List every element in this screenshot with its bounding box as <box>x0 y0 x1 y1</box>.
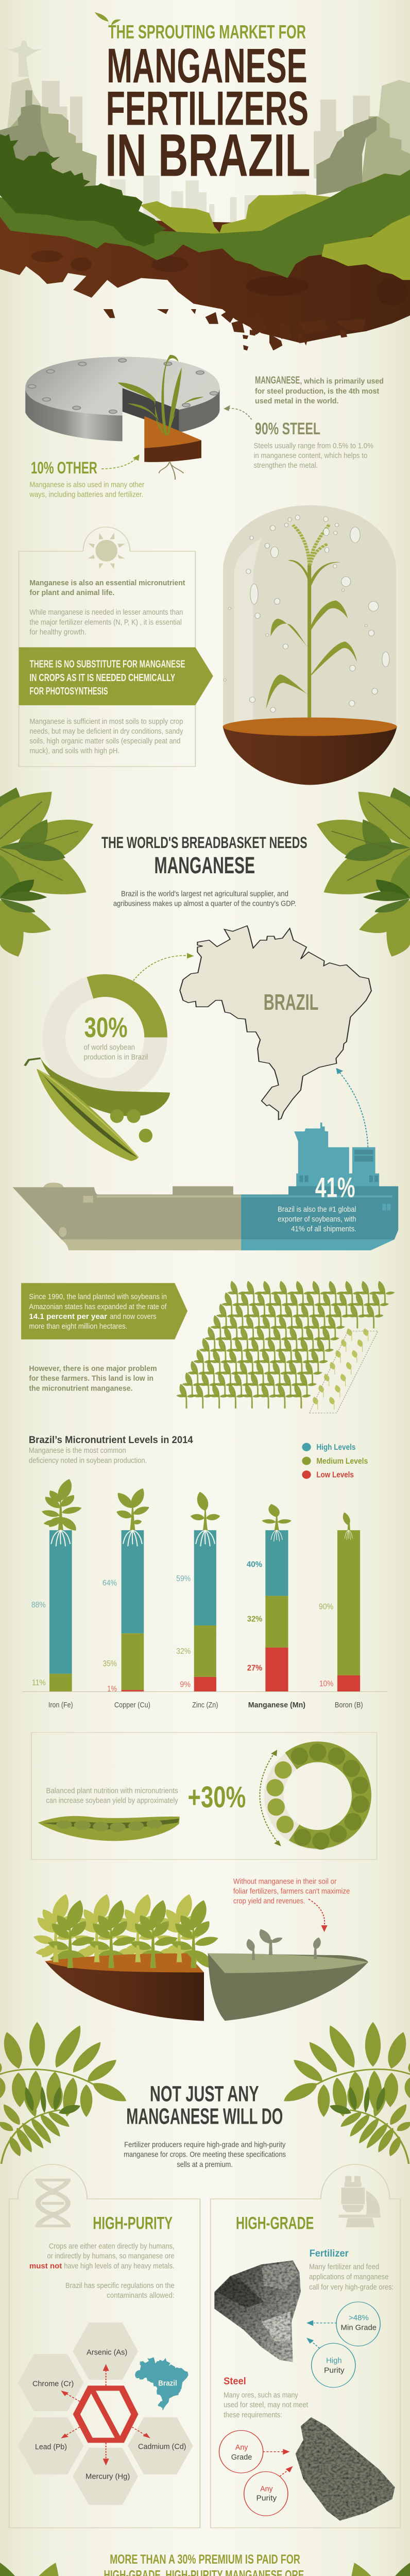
illustration: pea pods <box>25 1058 170 1161</box>
heading: micronutrient levels: Brazil’s Micronutrient Levels in 2014 <box>29 1434 193 1445</box>
diagram: contaminant hexagons <box>18 2323 193 2505</box>
text: crops eaten by humans: Crops are either eaten directly by humans, <box>49 2242 175 2250</box>
text: balanced nutrition <box>46 1787 178 1805</box>
leaves right <box>317 787 410 957</box>
text: without manganese <box>233 1877 350 1905</box>
fern left <box>0 2022 131 2164</box>
bar value labels: 32% <box>247 1615 262 1623</box>
callout: no substitute banner: THERE IS NO SUBSTITUTE FOR MANGANESE <box>29 658 185 670</box>
soil chunks <box>104 309 366 350</box>
steel disc pie <box>25 357 219 441</box>
legend: levels: High Levels <box>316 1443 355 1451</box>
grass and bushes <box>0 134 410 280</box>
callout: land expansion banner: and now covers <box>110 1312 157 1320</box>
bar category labels: Iron (Fe) <box>48 1701 73 1709</box>
bar value labels: 40% <box>247 1560 262 1569</box>
arrows: steel badges to rock <box>263 2449 293 2477</box>
illustration: open pea pod <box>38 1816 180 1841</box>
heading: world's breadbasket needs manganese <box>101 834 308 878</box>
heading: high-grade: HIGH-GRADE <box>236 2213 314 2233</box>
badge: any purity <box>244 2471 288 2516</box>
bar value labels: 10% <box>319 1679 333 1688</box>
bar category labels: Boron (B) <box>335 1701 363 1709</box>
diagram: contaminant hexagons: Arsenic (As) <box>87 2348 127 2357</box>
bar: copper <box>122 1530 144 1692</box>
illustration: high grade ore rock <box>214 2261 301 2362</box>
arrow: ship to map <box>336 1068 368 1147</box>
text: essential micronutrient: for plant and animal life. <box>29 588 114 597</box>
section: the opportunity <box>0 2552 410 2576</box>
callout: land expansion banner: more than eight million hectares. <box>29 1322 127 1331</box>
text: producers require: Fertilizer producers require high-grade and high-purity <box>124 2141 286 2149</box>
icon: microscope <box>338 2176 381 2227</box>
bar value labels: 90% <box>319 1602 333 1611</box>
text: essential micronutrient: Manganese is also an essential micronutrient <box>29 579 185 587</box>
illustration: cargo ship: Brazil is also the #1 global <box>278 1205 356 1213</box>
bar value labels: 64% <box>102 1579 117 1587</box>
text: major problem: However, there is one major problem <box>29 1364 157 1372</box>
text: lesser amounts: the major fertilizer elements (N, P, K) , it is essential <box>29 618 182 626</box>
callout: no substitute banner: FOR PHOTOSYNTHESIS <box>29 685 108 697</box>
illustration: healthy soil half <box>45 1945 204 2021</box>
text: major problem: for these farmers. This land is low in <box>29 1374 153 1383</box>
text: other uses: ways, including batteries and fertilizer. <box>29 490 143 499</box>
text: intro: Brazil is the world's largest net agricultural supplier, and <box>121 890 288 898</box>
text: other uses: Manganese is also used in many other <box>29 481 144 489</box>
legend: levels <box>302 1443 368 1479</box>
arrow: donut to map <box>133 953 194 980</box>
text: crops eaten by humans: Brazil has specific regulations on the <box>65 2281 175 2290</box>
bar value labels: 27% <box>247 1664 262 1672</box>
sprout on the title T <box>95 12 121 26</box>
map: Brazil <box>180 926 371 1120</box>
callout: land expansion banner: Since 1990, the land planted with soybeans in <box>29 1293 167 1301</box>
text: fertilizer applications <box>309 2263 394 2291</box>
leaves left <box>0 2563 121 2576</box>
bar category labels <box>48 1701 363 1709</box>
text: balanced nutrition: Balanced plant nutrition with micronutrients <box>46 1787 178 1795</box>
bar value labels: 88% <box>31 1600 46 1609</box>
bar category labels: Zinc (Zn) <box>192 1701 218 1709</box>
chart: 30% donut: 30% <box>84 1012 128 1043</box>
panel: micronutrient box outline <box>19 527 195 767</box>
text: lesser amounts <box>29 608 183 636</box>
diagram: contaminant hexagons: Cadmium (Cd) <box>138 2443 186 2451</box>
bar: zinc <box>194 1530 216 1692</box>
hero: title and landscape <box>0 12 410 343</box>
badge: any grade <box>219 2430 263 2473</box>
diagram: contaminant hexagons: Mercury (Hg) <box>86 2472 130 2481</box>
text: producers require: manganese for crops. Ore meeting these specifications <box>124 2150 286 2159</box>
map: Brazil mini: Brazil <box>158 2379 177 2387</box>
bar value labels: 32% <box>176 1647 191 1656</box>
text: producers require: sells at a premium. <box>177 2160 233 2168</box>
map: Brazil: BRAZIL <box>264 989 318 1014</box>
text: major problem <box>29 1364 157 1393</box>
callout: no substitute banner <box>19 647 213 705</box>
chart: ring of peas <box>264 1741 371 1850</box>
title: manganese fertilizers in Brazil <box>105 38 311 189</box>
illustration: plants above bars <box>40 1478 352 1533</box>
text: steel ores <box>224 2391 308 2419</box>
arrow: double headed arc <box>260 1750 281 1846</box>
badge: high purity <box>312 2343 355 2387</box>
text: steels <box>253 442 373 469</box>
diagram: contaminant hexagons: Lead (Pb) <box>35 2443 67 2451</box>
icon: sun <box>88 533 125 569</box>
chart: 30% donut: production is in Brazil <box>83 1053 148 1061</box>
arrow: steel to disc <box>224 405 251 419</box>
text: without manganese: crop yield and revenues. <box>233 1897 305 1905</box>
bar: boron <box>337 1530 360 1692</box>
bar category labels: Copper (Cu) <box>114 1701 150 1709</box>
bar value labels: 35% <box>103 1659 117 1668</box>
stat: 10% other: 10% OTHER <box>31 459 97 477</box>
arrow: to weak plants <box>309 1899 328 1932</box>
panel: steel vs other pie <box>19 309 397 785</box>
section: high purity and high grade <box>9 2164 400 2528</box>
illustration: cargo ship: 41% <box>315 1172 355 1203</box>
badge: min grade: >48% <box>349 2314 369 2322</box>
text: manganese 4th most used metal <box>255 375 384 405</box>
badge: high purity: High <box>326 2357 342 2365</box>
legend: levels: Medium Levels <box>316 1456 368 1465</box>
text: steel ores: Many ores, such as many <box>224 2391 298 2399</box>
text: crops eaten by humans: must not <box>29 2262 62 2270</box>
callout: land expansion banner: Amazonian states has expanded at the rate of <box>29 1302 167 1311</box>
text: manganese 4th most used metal: used metal in the world. <box>255 397 338 405</box>
chart: 30% donut: of world soybean <box>83 1043 135 1052</box>
heading: high-purity: HIGH-PURITY <box>93 2213 173 2233</box>
illustration: soybean plant field <box>176 1280 395 1413</box>
soil wedge with plant <box>117 355 204 480</box>
text: without manganese: Without manganese in their soil or <box>233 1877 337 1886</box>
text: steels: strengthen the metal. <box>253 461 318 469</box>
illustration: cargo ship: exporter of soybeans, with <box>278 1215 356 1223</box>
text: balanced nutrition: can increase soybean yield by approximately <box>46 1797 178 1805</box>
bar: iron <box>49 1530 72 1692</box>
badge: any grade: Grade <box>231 2453 252 2461</box>
text: steel ores: used for steel, may not meet <box>224 2401 308 2409</box>
text: chart subtitle: Manganese is the most common <box>29 1446 126 1455</box>
panel: high-grade <box>211 2164 400 2528</box>
text: essential micronutrient <box>29 579 185 597</box>
leaves left <box>0 787 93 957</box>
bar value labels <box>31 1560 333 1693</box>
stat: 90% steel: 90% STEEL <box>255 419 320 438</box>
text: crops eaten by humans <box>29 2242 175 2300</box>
bar value labels: 9% <box>180 1680 191 1689</box>
diagram: contaminant hexagons: Chrome (Cr) <box>32 2380 74 2388</box>
text: major problem: the micronutrient manganese. <box>29 1384 132 1393</box>
badge: any purity: Purity <box>257 2494 277 2502</box>
callout: 30% premium <box>104 2552 306 2576</box>
section: soybean expansion <box>21 1280 395 1533</box>
text: crops eaten by humans: contaminants allowed: <box>107 2291 175 2300</box>
city skyline <box>0 40 410 229</box>
section: world's breadbasket <box>0 787 410 957</box>
stat: +30%: +30% <box>188 1781 246 1814</box>
callout: land expansion banner <box>21 1283 187 1340</box>
callout: land expansion banner: 14.1 percent per year <box>29 1312 107 1320</box>
text: without manganese: foliar fertilizers, farmers can't maximize <box>233 1887 350 1895</box>
legend: levels: Low Levels <box>316 1470 354 1479</box>
badge: high purity: Purity <box>324 2366 345 2375</box>
text: soil sufficiency: needs, but may be deficient in dry conditions, sandy <box>29 727 183 735</box>
text: soil sufficiency <box>29 717 183 755</box>
heading: not just any manganese will do: NOT JUST ANY <box>150 2081 259 2106</box>
bar value labels: 11% <box>32 1678 46 1687</box>
fern right <box>279 2022 410 2164</box>
illustration: depleted soil half <box>208 1928 368 2021</box>
callout: no substitute banner: IN CROPS AS IT IS NEEDED CHEMICALLY <box>29 672 175 684</box>
heading: world's breadbasket needs manganese: MANGANESE <box>155 853 255 878</box>
heading: fertilizer: Fertilizer <box>310 2248 349 2259</box>
illustration: healthy plants <box>32 1893 220 1971</box>
chart: micronutrient stacked bars <box>22 1530 387 1859</box>
text: other uses <box>29 481 144 499</box>
illustration: cargo ship: 41% of all shipments. <box>291 1225 356 1233</box>
section: soybean map and ship <box>12 926 398 1250</box>
leaves right <box>290 2563 410 2576</box>
text: manganese 4th most used metal: MANGANESE <box>255 375 300 386</box>
illustration: steel ore rock <box>296 2417 395 2521</box>
text: intro <box>113 890 296 908</box>
text: steel ores: these requirements: <box>224 2411 282 2419</box>
text: soil sufficiency: Manganese is sufficient in most soils to supply crop <box>29 717 183 725</box>
bar category labels: Manganese (Mn) <box>248 1701 305 1709</box>
badge: any purity: Any <box>260 2485 273 2493</box>
text: intro: agribusiness makes up almost a quarter of the country's GDP. <box>113 900 296 908</box>
badge: min grade: Min Grade <box>341 2324 377 2332</box>
text: fertilizer applications: Many fertilizer and feed <box>309 2263 379 2271</box>
heading: steel: Steel <box>224 2376 246 2386</box>
text: crops eaten by humans: or indirectly by humans, so manganese ore <box>47 2252 175 2260</box>
arrow: other to wedge <box>101 454 140 469</box>
map: Brazil mini <box>135 2357 189 2410</box>
arrows: fertilizer badges to rock <box>306 2320 337 2348</box>
text: lesser amounts: for healthy growth. <box>29 628 87 636</box>
text: lesser amounts: While manganese is needed in lesser amounts than <box>29 608 183 617</box>
heading: not just any manganese will do <box>126 2081 283 2129</box>
bar: manganese <box>265 1530 288 1692</box>
text: crops eaten by humans: have high levels of any heavy metals. <box>64 2262 175 2270</box>
panel: +30% yield box <box>31 1733 377 1859</box>
badge: any grade: Any <box>235 2443 248 2451</box>
icon: DNA helix <box>36 2179 71 2227</box>
soil layer <box>0 217 410 343</box>
illustration: glass dome with plant <box>223 505 397 785</box>
bar value labels: 59% <box>176 1574 191 1583</box>
section: soil comparison <box>0 1877 410 2168</box>
text: chart subtitle <box>29 1446 147 1465</box>
panel: high-purity <box>9 2164 200 2528</box>
illustration: cargo ship <box>12 1123 398 1250</box>
chart: 30% donut <box>42 974 167 1101</box>
text: soil sufficiency: muck), and soils with high pH. <box>29 747 119 755</box>
text: producers require <box>124 2141 286 2168</box>
text: chart subtitle: deficiency noted in soybean production. <box>29 1456 147 1465</box>
bar value labels: 1% <box>107 1685 117 1693</box>
text: soil sufficiency: soils, high organic matter soils (especially peat and <box>29 737 180 745</box>
badge: min grade <box>336 2302 380 2346</box>
